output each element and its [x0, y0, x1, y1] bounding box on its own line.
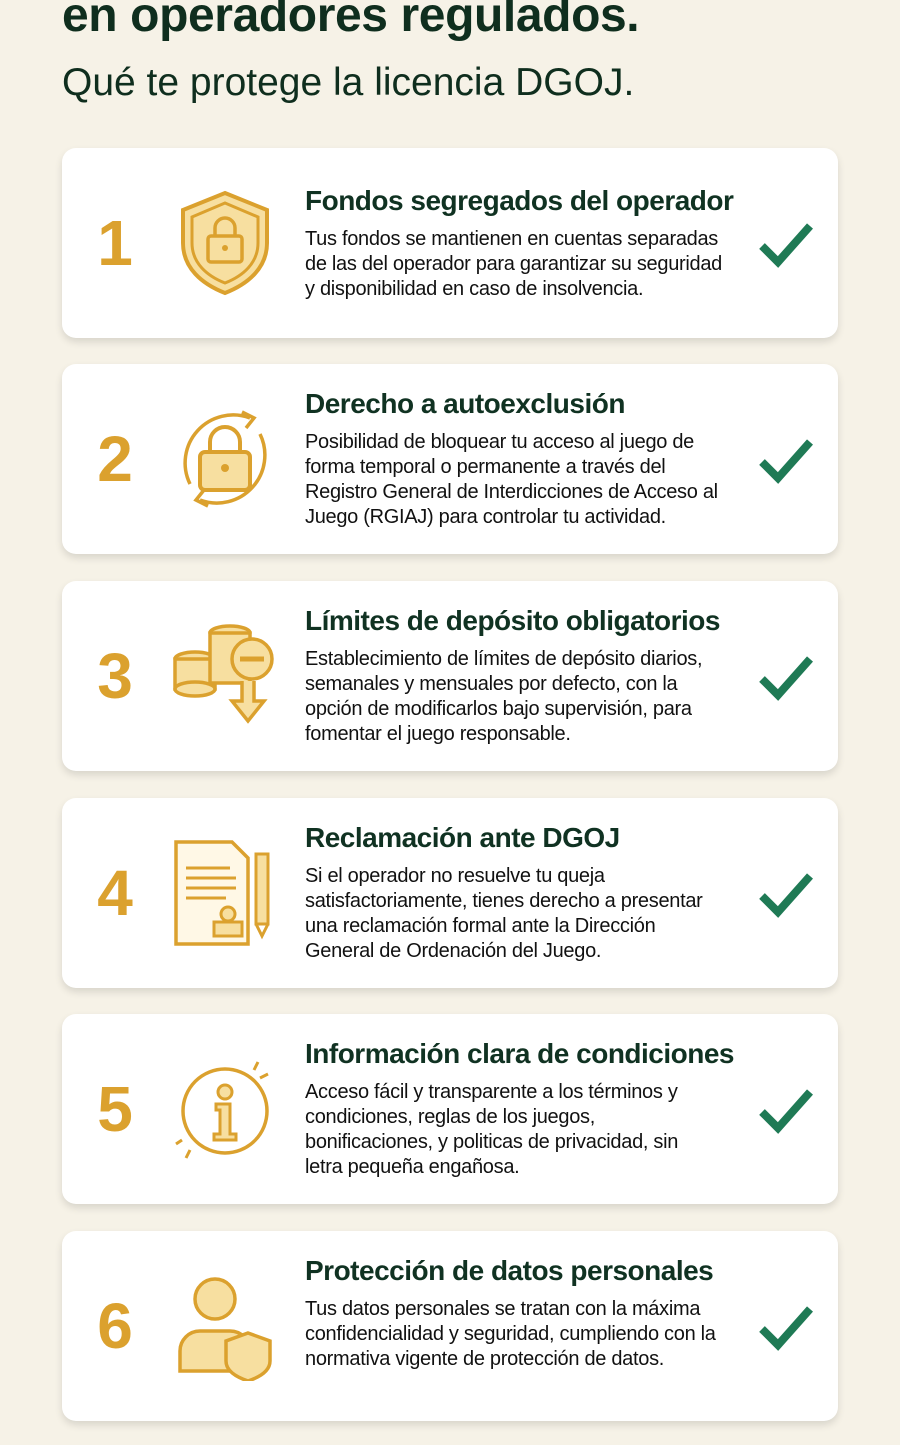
panel: card 4	[62, 798, 838, 988]
panel: card 5: condiciones, reglas de los juegos,	[305, 1106, 595, 1128]
panel: card 5: Información clara de condiciones	[305, 1038, 734, 1069]
panel: card 3: 3	[97, 640, 133, 712]
panel: card 6	[62, 1231, 838, 1421]
panel: card 5: 5	[97, 1073, 133, 1145]
panel: card 2: Derecho a autoexclusión	[305, 388, 625, 419]
icon: circular lock	[183, 410, 267, 508]
panel: card 3: Límites de depósito obligatorios	[305, 605, 720, 636]
panel: card 4: General de Ordenación del Juego.	[305, 940, 601, 962]
panel: card 6: confidencialidad y seguridad, cumpliendo con la	[305, 1323, 716, 1345]
panel: card 6: Tus datos personales se tratan con la máxima	[305, 1298, 700, 1320]
panel: card 2: Posibilidad de bloquear tu acceso al juego de	[305, 431, 694, 453]
panel: card 5: Acceso fácil y transparente a los términos y	[305, 1081, 678, 1103]
panel: card 6: 6	[97, 1290, 133, 1362]
panel: card 4: Si el operador no resuelve tu queja	[305, 865, 605, 887]
panel: card 1: y disponibilidad en caso de insolvencia.	[305, 278, 643, 300]
panel: card 3: semanales y mensuales por defecto, con la	[305, 673, 677, 695]
panel: card 3: fomentar el juego responsable.	[305, 723, 571, 745]
icon: check	[759, 1306, 813, 1351]
panel: card 1	[62, 148, 838, 338]
icon: document stamp	[174, 840, 270, 946]
panel: card 5	[62, 1014, 838, 1204]
icon: check	[759, 439, 813, 484]
panel: card 1: Tus fondos se mantienen en cuentas separadas	[305, 228, 718, 250]
subtitle: Qué te protege la licencia DGOJ.	[62, 61, 634, 104]
icon: check	[759, 873, 813, 918]
panel: card 2: forma temporal o permanente a través del	[305, 456, 665, 478]
panel: card 3: opción de modificarlos bajo supervisión, para	[305, 698, 692, 720]
panel: card 5: letra pequeña engañosa.	[305, 1156, 519, 1178]
icon: shield lock	[181, 190, 269, 296]
icon: check	[759, 223, 813, 268]
panel: card 5: bonificaciones, y politicas de privacidad, sin	[305, 1131, 678, 1153]
panel: card 3	[62, 581, 838, 771]
panel: card 2: Juego (RGIAJ) para controlar tu actividad.	[305, 506, 666, 528]
icon: info	[175, 1061, 269, 1159]
panel: card 1: 1	[97, 207, 133, 279]
panel: card 3: Establecimiento de límites de depósito diarios,	[305, 648, 702, 670]
panel: card 4: una reclamación formal ante la Dirección	[305, 915, 655, 937]
panel: card 2	[62, 364, 838, 554]
panel: card 2: 2	[97, 423, 133, 495]
panel: card 1: de las del operador para garantizar su seguridad	[305, 252, 722, 274]
panel: card 4: satisfactoriamente, tienes derecho a presentar	[305, 890, 703, 912]
panel: card 4: Reclamación ante DGOJ	[305, 822, 620, 853]
panel: card 4: 4	[97, 857, 133, 929]
panel: card 6: normativa vigente de protección de datos.	[305, 1348, 664, 1370]
icon: coins with arrow	[173, 624, 274, 724]
panel: card 1: Fondos segregados del operador	[305, 184, 733, 216]
panel: card 6: Protección de datos personales	[305, 1255, 713, 1286]
icon: person shield	[178, 1277, 272, 1381]
icon: check	[759, 1089, 813, 1134]
icon: check	[759, 656, 813, 701]
panel: card 2: Registro General de Interdicciones de Acceso al	[305, 481, 718, 503]
